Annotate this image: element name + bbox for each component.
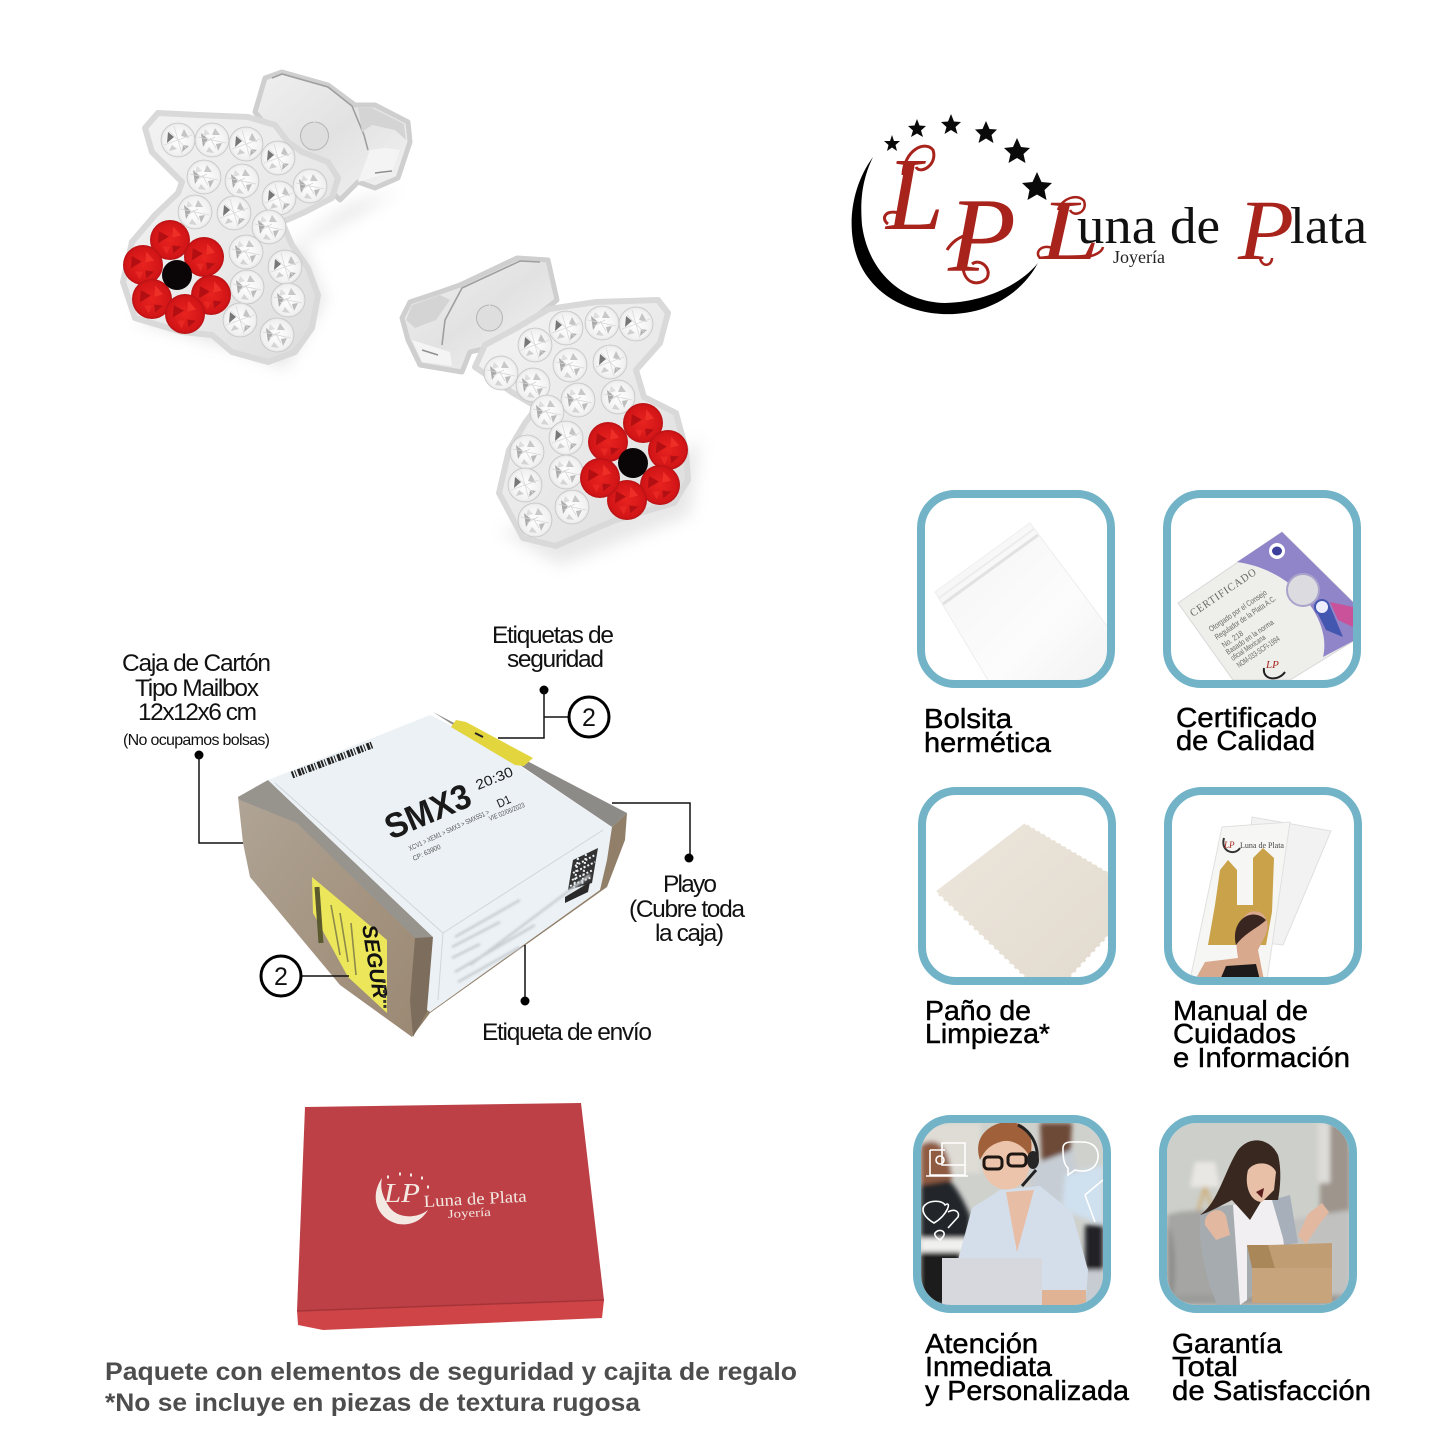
callout: etiquetas de seguridad: 2 xyxy=(582,704,596,732)
panel: certificado de calidad xyxy=(1167,494,1358,756)
icon: certificate: LP xyxy=(1265,659,1279,671)
photo: happy customer opening box xyxy=(1167,1123,1350,1305)
callout: etiqueta de envio: Etiqueta de envío xyxy=(482,1019,652,1046)
earring back clasp xyxy=(255,72,410,200)
yellow side security sticker xyxy=(312,877,391,1013)
logo: Luna de Plata Joyería: lata xyxy=(1290,198,1367,255)
logo: Luna de Plata Joyería: de xyxy=(1170,198,1220,255)
icon: certificate: Otorgado por el Consejo xyxy=(1207,588,1269,634)
label xyxy=(925,995,1050,1049)
red crystal flower xyxy=(123,220,231,334)
gift box logo: Luna de Plata xyxy=(423,1187,528,1211)
label text: D1 xyxy=(495,792,513,811)
logo: Luna de Plata Joyería: una xyxy=(1077,198,1156,255)
logo: Luna de Plata Joyería: Joyería xyxy=(1113,247,1165,267)
icon: certificate: No. 218 xyxy=(1220,629,1245,650)
left cardboard face xyxy=(238,782,433,1037)
right cardboard face xyxy=(412,813,627,1037)
icon: brochures: LP xyxy=(1223,840,1235,850)
callout: second security label xyxy=(261,956,349,996)
gift box logo xyxy=(376,1174,528,1224)
footnote text: *No se incluye en piezas de textura rugosa xyxy=(105,1389,641,1417)
icon: certificate: oficial Mexicana xyxy=(1229,633,1268,663)
blurred address lines xyxy=(452,875,590,982)
callout: caja de carton: Tipo Mailbox xyxy=(135,675,259,702)
cardboard mailbox package photo xyxy=(238,712,627,1037)
label: Paño de xyxy=(925,995,1031,1026)
callout: caja de carton: Caja de Cartón xyxy=(122,650,271,677)
stars xyxy=(884,114,1052,200)
cardboard box xyxy=(1247,1243,1332,1303)
label text xyxy=(379,763,526,863)
label xyxy=(1172,1328,1371,1406)
callout: playo: la caja) xyxy=(655,920,724,947)
callout: playo: Playo xyxy=(663,871,717,898)
callout: playo: (Cubre toda xyxy=(629,896,745,923)
callout: etiqueta de envio xyxy=(482,945,652,1046)
callout: caja de carton: (No ocupamos bolsas) xyxy=(123,732,270,749)
callout: etiquetas de seguridad: seguridad xyxy=(507,646,604,673)
bear body xyxy=(475,300,688,546)
callout: playo xyxy=(612,803,745,947)
icon: certificate xyxy=(1178,532,1358,680)
wordmark: L xyxy=(1037,182,1100,278)
callout: etiquetas de seguridad: Etiquetas de xyxy=(492,622,614,649)
photo: customer service agent xyxy=(921,1122,1103,1305)
left earring: teddy bear stud xyxy=(123,72,410,368)
logo: Luna de Plata Joyería: P xyxy=(947,177,1016,294)
clear crystals xyxy=(484,306,653,537)
label text: XCV1 > XEM1 > SMX3 > SMX551 > xyxy=(408,809,491,853)
icon: certificate: Basado en la norma xyxy=(1224,618,1276,657)
crescent moon xyxy=(852,157,1038,314)
label: de Satisfacción xyxy=(1172,1375,1371,1406)
icon: brochures: Luna de Plata xyxy=(1240,841,1284,850)
label text: VIE 02/06/2023 xyxy=(488,802,526,823)
bear body xyxy=(123,113,338,362)
label text: CP: 63900 xyxy=(412,844,442,863)
gift box logo: LP xyxy=(383,1178,420,1208)
panel: manual de cuidados xyxy=(1168,791,1358,1073)
label: y Personalizada xyxy=(925,1375,1129,1406)
label xyxy=(925,1328,1129,1406)
plastic wrap band xyxy=(238,712,627,1037)
label: Bolsita xyxy=(924,703,1012,734)
label: Inmediata xyxy=(925,1351,1052,1382)
monogram letters: L xyxy=(884,137,944,252)
QR code xyxy=(565,848,598,903)
callout: second security label: 2 xyxy=(274,963,288,991)
label: e Información xyxy=(1173,1042,1350,1073)
logo: Luna de Plata Joyería: P xyxy=(1237,182,1294,278)
logo: Luna de Plata Joyería xyxy=(852,114,1367,314)
clear crystals xyxy=(161,123,327,352)
label: Certificado xyxy=(1176,702,1317,733)
icon: polishing cloth xyxy=(935,823,1108,980)
right earring: teddy bear stud xyxy=(402,258,700,565)
red crystal flower xyxy=(580,403,688,520)
footnote text: Paquete con elementos de seguridad y cajita de regalo xyxy=(105,1358,797,1386)
label: Limpieza* xyxy=(925,1018,1050,1049)
gift box logo: Joyería xyxy=(447,1205,492,1221)
panel: garantia total xyxy=(1163,1119,1371,1406)
label: Total xyxy=(1172,1351,1238,1382)
callout: caja de carton: 12x12x6 cm xyxy=(138,699,257,726)
callout: etiquetas de seguridad xyxy=(492,622,614,738)
monogram flourishes xyxy=(884,146,988,283)
footnote text xyxy=(105,1358,797,1417)
label: hermética xyxy=(924,727,1051,758)
label: de Calidad xyxy=(1176,725,1315,756)
label text: SMX3 xyxy=(379,776,477,847)
icons overlay xyxy=(923,1142,1103,1240)
icon: certificate: Regulador de la Plata A.C. xyxy=(1213,594,1278,642)
panel: pano de limpieza xyxy=(922,791,1112,1049)
callouts for package xyxy=(122,622,745,1046)
callout: caja de carton xyxy=(122,650,271,843)
label xyxy=(924,703,1051,758)
earring back clasp xyxy=(402,258,557,372)
label xyxy=(1173,995,1350,1073)
icon: certificate: NOM-033-SCFI-1994 xyxy=(1235,634,1282,670)
label: Atención xyxy=(925,1328,1038,1359)
label: Garantía xyxy=(1172,1328,1282,1359)
icon: brochures xyxy=(1190,817,1331,980)
red gift box xyxy=(297,1103,604,1330)
barcode xyxy=(292,745,372,775)
label: Manual de xyxy=(1173,995,1308,1026)
label: Cuidados xyxy=(1173,1018,1296,1049)
panel: atencion inmediata xyxy=(917,1119,1129,1406)
icon: zip bag xyxy=(934,522,1107,680)
yellow side security sticker: SEGUR xyxy=(357,923,391,1001)
label text: 20:30 xyxy=(473,763,515,793)
white shipping label xyxy=(268,715,612,1012)
panel: bolsita hermetica xyxy=(921,494,1111,758)
label xyxy=(1176,702,1317,756)
icon: certificate: CERTIFICADO xyxy=(1188,566,1259,619)
yellow top security sticker xyxy=(451,720,533,766)
